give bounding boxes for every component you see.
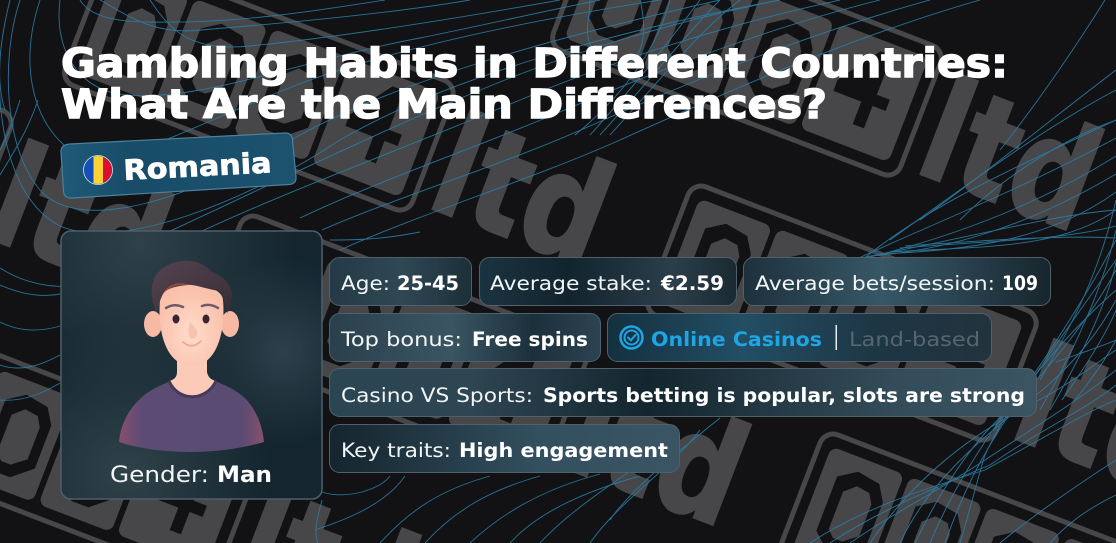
country name: Romania	[123, 146, 272, 187]
panel: persona card	[61, 231, 322, 499]
pill: online casinos vs land-based: Land-based	[849, 328, 980, 351]
pill: average bets per session	[744, 258, 1050, 306]
pill: average bets per session: Average bets/session:	[755, 272, 995, 295]
country badge: Romania	[61, 133, 296, 198]
pill: average stake	[480, 258, 736, 306]
title	[61, 41, 1008, 128]
pill: key traits: Key traits:	[341, 439, 451, 462]
pill: key traits: High engagement	[459, 439, 668, 462]
gender label: Man	[217, 463, 272, 488]
icon: man avatar	[119, 261, 264, 452]
pill: top bonus: Top bonus:	[340, 328, 462, 351]
pill: online casinos vs land-based: Online Casinos	[651, 328, 822, 351]
pill: top bonus	[330, 314, 600, 362]
pill: key traits	[330, 424, 680, 472]
pill: age	[330, 258, 472, 306]
gender label: Gender:	[110, 463, 209, 488]
pill: casino vs sports: Sports betting is popular, slots are strong	[543, 384, 1025, 407]
title: What Are the Main Differences?	[61, 82, 827, 128]
pill: age: Age:	[341, 272, 390, 295]
pill: average stake: €2.59	[660, 272, 724, 295]
pill: casino vs sports	[330, 368, 1036, 416]
title: Gambling Habits in Different Countries:	[61, 41, 1008, 87]
gender label	[110, 463, 272, 488]
pill: average bets per session: 109	[1002, 272, 1038, 295]
pill: top bonus: Free spins	[472, 328, 588, 351]
icon: Romanian flag	[84, 155, 113, 185]
pill: average stake: Average stake:	[490, 272, 652, 295]
pill: casino vs sports: Casino VS Sports:	[341, 384, 533, 407]
pill: online casinos vs land-based	[608, 314, 992, 362]
pill: age: 25-45	[397, 272, 459, 295]
icon: check badge	[620, 326, 642, 348]
